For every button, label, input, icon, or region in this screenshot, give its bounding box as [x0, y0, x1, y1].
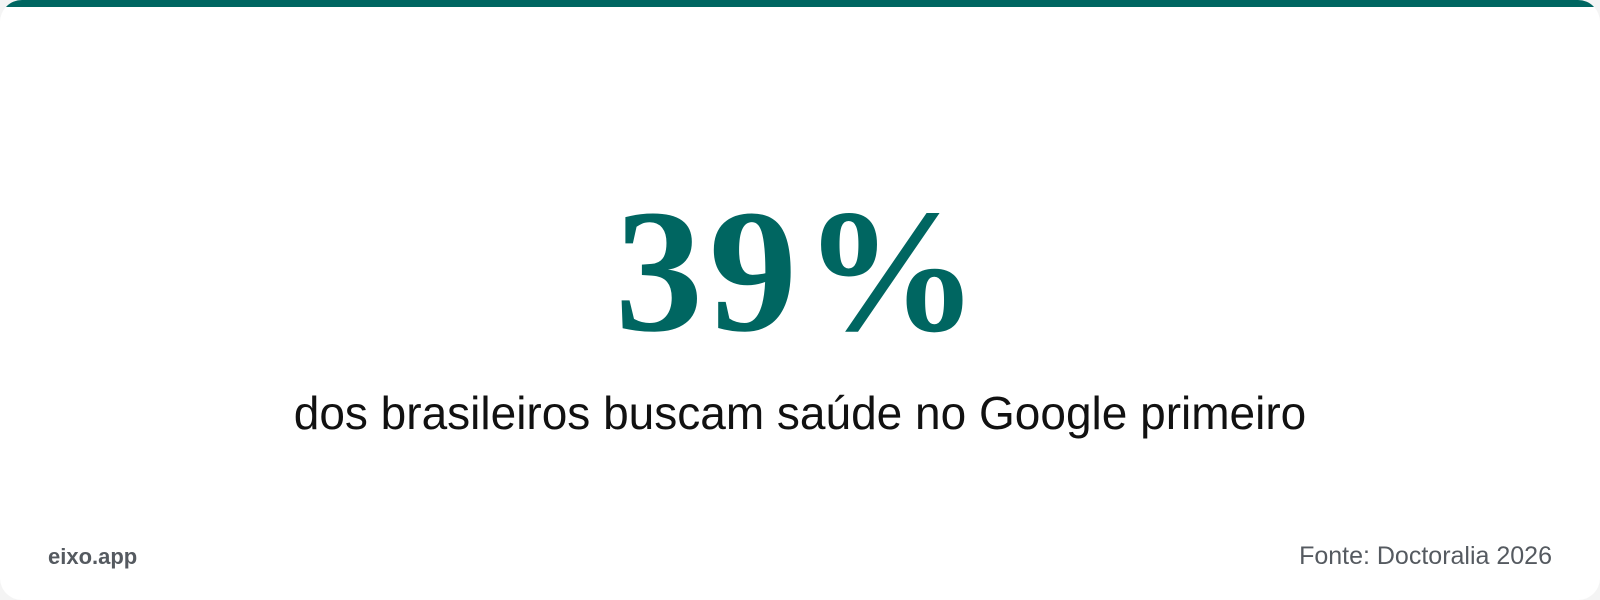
source: Fonte: Doctoralia 2026 [1299, 542, 1552, 570]
caption: dos brasileiros buscam saúde no Google primeiro [294, 387, 1306, 439]
top accent bar [0, 0, 1600, 7]
big statistic: 39% [615, 174, 985, 369]
brand: eixo.app [48, 544, 137, 569]
